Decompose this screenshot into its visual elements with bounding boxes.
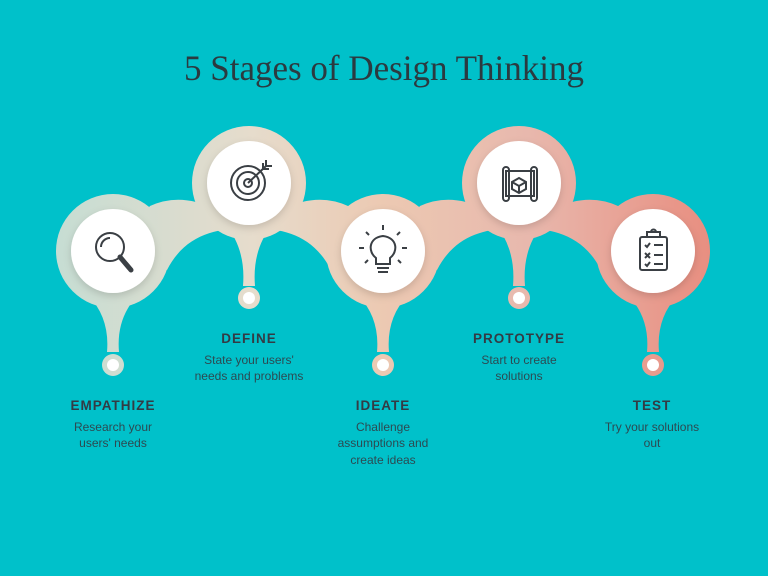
stage: ideate: assumptions and	[338, 436, 428, 450]
drops	[88, 295, 138, 352]
stage: test	[605, 398, 699, 450]
stage: define: DEFINE	[221, 331, 277, 346]
stage: empathize	[70, 398, 156, 450]
stage: empathize: users' needs	[79, 436, 147, 450]
icon: target	[231, 160, 272, 200]
icon: clipboard	[640, 230, 667, 270]
icon: lightbulb	[359, 225, 407, 272]
stage: empathize: EMPATHIZE	[70, 398, 156, 413]
icon: blueprint	[503, 167, 537, 201]
stage: test: Try your solutions	[605, 420, 699, 434]
stage: prototype	[473, 331, 565, 383]
stage: define: State your users'	[204, 353, 294, 367]
stage: ideate: IDEATE	[356, 398, 410, 413]
icon: magnifier	[96, 233, 131, 270]
stage: test: out	[644, 436, 661, 450]
stage: test: TEST	[633, 398, 671, 413]
white icon circles	[71, 141, 695, 293]
stage: prototype: PROTOTYPE	[473, 331, 565, 346]
stage: ideate: create ideas	[350, 453, 416, 467]
wave band	[56, 126, 710, 376]
title: 5 Stages of Design Thinking	[184, 48, 584, 88]
stage: ideate: Challenge	[356, 420, 410, 434]
stage: empathize: Research your	[74, 420, 152, 434]
stage: define: needs and problems	[195, 369, 303, 383]
stage: prototype: Start to create	[481, 353, 557, 367]
stage: ideate	[338, 398, 428, 467]
stage: define	[195, 331, 303, 383]
stage: prototype: solutions	[495, 369, 543, 383]
